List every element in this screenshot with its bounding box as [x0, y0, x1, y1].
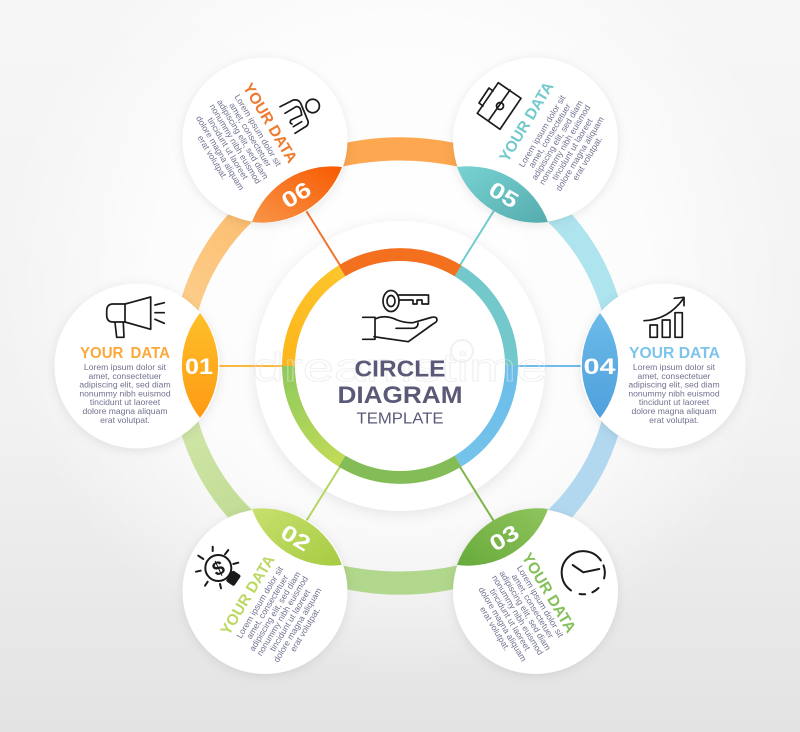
- heading 05: YOUR DATA: [496, 79, 557, 165]
- body 02: adipiscing elit, sed diam: [247, 570, 303, 653]
- icon: megaphone: [107, 297, 164, 337]
- body 02: amet, consectetuer: [244, 573, 290, 641]
- title: [338, 356, 462, 428]
- connector 01: [215, 365, 284, 367]
- number 06: 06: [277, 176, 316, 213]
- body 03: erat volutpat.: [478, 605, 512, 653]
- title line 1: CIRCLE: [354, 356, 446, 382]
- lens 05: [457, 166, 548, 223]
- connector 04: [516, 365, 585, 367]
- center segment blue: [458, 366, 512, 461]
- panel: 05: [453, 58, 618, 223]
- circle 05: [453, 58, 618, 222]
- circle 01: [54, 284, 220, 448]
- body 03: nonummy nibh euismod: [490, 573, 546, 657]
- panel: 03: [453, 508, 618, 674]
- heading 02: YOUR DATA: [218, 552, 279, 638]
- body 01: erat volutpat.: [100, 415, 150, 425]
- body 01: adipiscing elit, sed diam: [79, 380, 171, 390]
- bulb base: [226, 570, 241, 586]
- connector 03: [457, 462, 495, 523]
- number 03: 03: [485, 519, 524, 556]
- body 05: erat volutpat.: [570, 134, 604, 182]
- connector 05: [457, 209, 495, 270]
- body 06: adipiscing elit, sed diam: [215, 98, 271, 181]
- number 01: 01: [185, 354, 213, 379]
- dollar sign: $: [209, 557, 228, 581]
- connector 02: [305, 462, 343, 523]
- circle 02: [182, 509, 348, 674]
- number 05: 05: [484, 176, 523, 213]
- icon: growth chart: [644, 297, 684, 337]
- center segment yellow: [288, 271, 342, 366]
- ring band 05-04: [548, 214, 618, 312]
- body 06: Lorem ipsum dolor sit: [233, 92, 284, 169]
- body 01: dolore magna aliquam: [82, 406, 168, 416]
- circle 03: [453, 509, 618, 674]
- body 01: amet, consectetuer: [88, 371, 162, 381]
- lens 02: [252, 508, 342, 566]
- circle 04: [580, 284, 746, 448]
- body 03: amet, consectetuer: [510, 572, 556, 640]
- body 05: amet, consectetuer: [526, 102, 573, 170]
- center ring: [288, 255, 512, 477]
- panel: 02: [182, 508, 348, 674]
- lens 06: [252, 166, 342, 223]
- body 04: dolore magna aliquam: [631, 406, 717, 416]
- number 04: 04: [584, 354, 616, 379]
- body 04: nonummy nibh euismod: [628, 388, 720, 398]
- body 06: nonummy nibh euismod: [208, 102, 263, 186]
- watermark: [252, 340, 548, 390]
- body 04: adipiscing elit, sed diam: [628, 380, 720, 390]
- body 05: dolore magna aliquam: [554, 115, 606, 193]
- heading 04: YOUR DATA: [629, 345, 720, 362]
- circle 06: [182, 58, 348, 222]
- body 03: Lorem ipsum dolor sit: [515, 564, 566, 640]
- outer ring: [182, 137, 618, 595]
- heading 01: YOUR DATA: [80, 345, 170, 362]
- center segment teal: [458, 271, 512, 366]
- bulb outline and rays: [196, 547, 238, 588]
- body 05: Lorem ipsum dolor sit: [517, 93, 568, 169]
- ring band 01-06: [182, 214, 252, 312]
- icon: dollar bulb: [196, 547, 241, 588]
- body 02: Lorem ipsum dolor sit: [234, 564, 285, 640]
- icon: person: [280, 99, 319, 133]
- body 01: nonummy nibh euismod: [79, 388, 171, 398]
- number 02: 02: [276, 519, 315, 556]
- icon: clock: [562, 551, 605, 594]
- body 06: erat volutpat.: [196, 134, 230, 181]
- body 03: adipiscing elit, sed diam: [497, 569, 553, 652]
- middle disc: [255, 221, 545, 511]
- ring band 06-05: [340, 137, 460, 167]
- watermark logo: [451, 340, 473, 362]
- connector lines: [215, 209, 585, 523]
- body 05: adipiscing elit, sed diam: [529, 98, 585, 182]
- inner disc: [295, 261, 505, 471]
- body 02: dolore magna aliquam: [271, 586, 324, 664]
- body 01: tincidunt ut laoreet: [90, 397, 161, 407]
- lens 03: [457, 508, 548, 566]
- connector 06: [305, 209, 343, 270]
- watermark word: dreamstime: [252, 346, 548, 390]
- body 03: dolore magna aliquam: [476, 585, 529, 663]
- panel: 01: [54, 284, 220, 448]
- body 04: tincidunt ut laoreet: [639, 397, 710, 407]
- lens 01: [182, 313, 218, 418]
- body 06: dolore magna aliquam: [194, 114, 246, 192]
- body 03: tincidunt ut laoreet: [488, 587, 533, 653]
- hand: [363, 317, 437, 342]
- ring band 03-02: [340, 565, 460, 595]
- body 02: erat volutpat.: [288, 606, 322, 653]
- lens 04: [582, 313, 618, 418]
- panel: 06: [182, 58, 348, 223]
- center icon: key in hand: [363, 290, 437, 342]
- key: [383, 290, 428, 312]
- ring band 04-03: [548, 420, 618, 518]
- body 01: Lorem ipsum dolor sit: [84, 362, 167, 372]
- title line 2: DIAGRAM: [338, 382, 462, 409]
- center segment dark green: [342, 461, 458, 477]
- subtitle: TEMPLATE: [356, 410, 444, 428]
- body 04: amet, consectetuer: [637, 371, 711, 381]
- panel: 04: [580, 284, 746, 448]
- body 04: Lorem ipsum dolor sit: [633, 362, 716, 372]
- center segment orange: [342, 255, 458, 271]
- icon: briefcase: [477, 83, 521, 129]
- body 06: amet, consectetuer: [227, 101, 274, 169]
- body 04: erat volutpat.: [649, 415, 699, 425]
- body 02: tincidunt ut laoreet: [267, 587, 313, 653]
- body 05: tincidunt ut laoreet: [550, 116, 595, 182]
- body 06: tincidunt ut laoreet: [205, 116, 250, 182]
- heading 06: YOUR DATA: [239, 80, 300, 166]
- ring band 02-01: [182, 420, 252, 518]
- heading 03: YOUR DATA: [518, 550, 579, 636]
- body 02: nonummy nibh euismod: [255, 574, 310, 658]
- center segment light green: [288, 366, 342, 461]
- body 05: nonummy nibh euismod: [537, 103, 593, 186]
